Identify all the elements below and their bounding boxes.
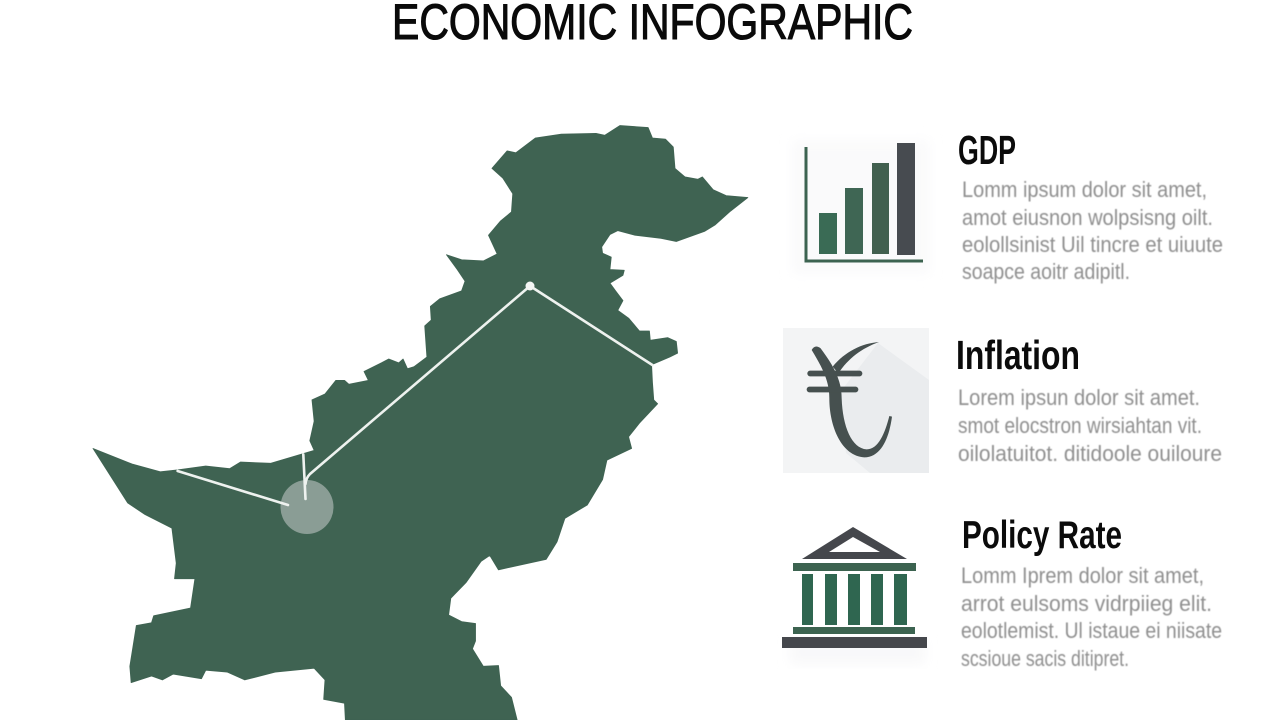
text block: GDP description: Lomm ipsum dolor sit amet, bbox=[962, 177, 1207, 202]
text block: Policy Rate description: arrot eulsoms vidrpiieg elit. bbox=[961, 591, 1212, 616]
icon: bank building bbox=[782, 527, 927, 664]
heading: Policy Rate: Policy Rate bbox=[962, 514, 1122, 557]
text block: Inflation description: oilolatuitot. ditidoole ouiloure bbox=[958, 441, 1222, 466]
connector lines bbox=[178, 286, 652, 505]
highlight circle bbox=[280, 480, 334, 534]
icon: bar chart bbox=[792, 140, 930, 274]
map of Pakistan with connector lines bbox=[93, 126, 748, 720]
heading: GDP: GDP bbox=[958, 127, 1016, 173]
text block: GDP description: soapce aoitr adipitl. bbox=[962, 259, 1130, 284]
text block: GDP description: amot eiusnon wolpsisng oilt. bbox=[962, 205, 1213, 230]
item: Inflation bbox=[783, 328, 1222, 473]
text block: Policy Rate description: eolotlemist. Ul istaue ei niisate bbox=[961, 618, 1222, 643]
text block: GDP description: eolollsinist Uil tincre et uiuute bbox=[962, 232, 1223, 257]
text block: Policy Rate description bbox=[961, 563, 1222, 671]
text block: Inflation description: smot elocstron wirsiahtan vit. bbox=[958, 413, 1202, 438]
text block: Policy Rate description: Lomm Iprem dolor sit amet, bbox=[961, 563, 1204, 588]
text block: Inflation description: Lorem ipsun dolor sit amet. bbox=[958, 385, 1200, 410]
heading: Inflation: Inflation bbox=[956, 332, 1080, 378]
connector node bbox=[526, 282, 534, 290]
item: GDP bbox=[792, 127, 1223, 284]
text block: Policy Rate description: scsioue sacis ditipret. bbox=[961, 646, 1129, 671]
text block: Inflation description bbox=[958, 385, 1222, 466]
icon: currency symbol bbox=[783, 328, 929, 473]
text block: GDP description bbox=[962, 177, 1223, 284]
map silhouette bbox=[93, 126, 748, 720]
item: Policy Rate bbox=[782, 514, 1222, 671]
